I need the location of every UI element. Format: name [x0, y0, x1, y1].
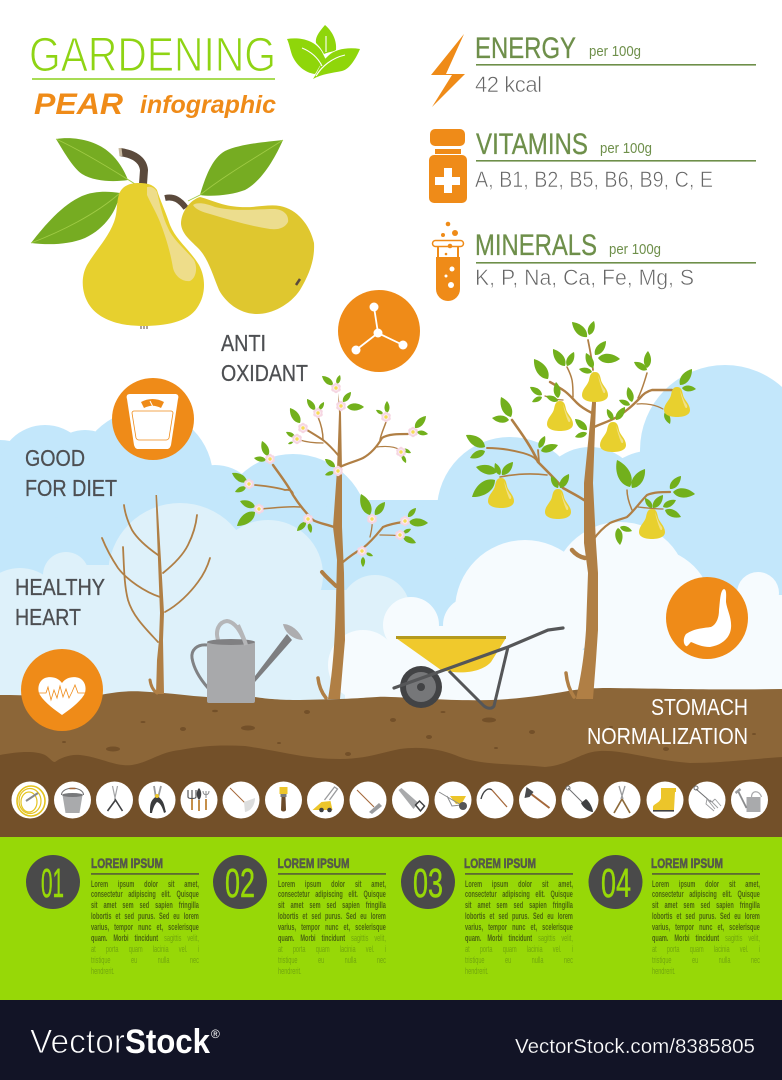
heading: vitamins: VITAMINS: [476, 128, 588, 161]
section 04: body text: hendrerit.: [652, 966, 676, 976]
heading: energy: [475, 32, 756, 66]
benefit label: heart: HEALTHY: [15, 574, 105, 600]
footer bar: ®: [211, 1027, 220, 1041]
section 03: body text: consectetur adipiscing elit. Quisque: [465, 889, 573, 899]
benefit label: diet: GOOD: [25, 445, 85, 471]
footer bar: Vector: [30, 1023, 125, 1061]
section 03: number badge: [401, 855, 455, 909]
sky: back blue clouds: [0, 365, 782, 700]
section 02: number badge: [213, 855, 267, 909]
section 03: heading: LOREM IPSUM: [464, 855, 536, 871]
bare sapling: [102, 495, 210, 694]
icon: scythe: [476, 782, 514, 818]
section 03: body text: sit amet sem sed sapien fringilla: [465, 900, 573, 910]
heading: minerals: [475, 229, 756, 264]
section 03: body text: quam. Morbi tincidunt sagittis velit,: [465, 933, 573, 943]
section 04: body text: Lorem ipsum dolor sit amet,: [652, 879, 760, 889]
icon: vitamin bottle: [429, 129, 467, 203]
section 03: body text: tristique eu nulla nec: [465, 955, 573, 965]
section 02: body text: quam. Morbi tincidunt sagittis velit,: [278, 933, 386, 943]
section 03: body text: hendrerit.: [465, 966, 489, 976]
heading: vitamins: [476, 128, 756, 162]
value: vitamins: A, B1, B2, B5, B6, B9, C, E: [475, 167, 713, 192]
benefit label: diet: [25, 445, 117, 501]
value: energy: 42 kcal: [475, 72, 542, 97]
section 01: number badge: [26, 855, 80, 909]
section 02: body text: [278, 879, 386, 976]
section 01: number badge: 01: [41, 860, 64, 906]
section 04: body text: sit amet sem sed sapien fringilla: [652, 900, 760, 910]
section 01: body text: hendrerit.: [91, 966, 115, 976]
section 03: body text: lobortis et sed purus. Sed eu lorem: [465, 911, 573, 921]
icon: spade: [562, 782, 598, 818]
section 04: body text: [652, 879, 760, 976]
heading: vitamins: per 100g: [600, 140, 652, 157]
icon: small watering can: [731, 782, 768, 818]
soil: upper layer: [0, 688, 782, 840]
icon: lightning bolt: [431, 34, 465, 107]
section 04: body text: quam. Morbi tincidunt sagittis velit,: [652, 933, 760, 943]
section 04: body text: varius, tempor nunc et, scelerisque: [652, 922, 760, 932]
icon: garden fork: [688, 782, 726, 818]
icon: logo leaves: [287, 25, 360, 79]
section 01: heading: LOREM IPSUM: [91, 855, 163, 871]
section 04: body text: at porta quam lacinia vel. i: [652, 944, 760, 954]
illustration: two pears with leaves: [31, 138, 314, 329]
icon: rubber boot: [646, 782, 684, 818]
section 03: body text: Lorem ipsum dolor sit amet,: [465, 879, 573, 889]
section 01: body text: sit amet sem sed sapien fringilla: [91, 900, 199, 910]
section 04: body text: lobortis et sed purus. Sed eu lorem: [652, 911, 760, 921]
subtitle: pear: PEAR: [34, 88, 123, 121]
section 02: body text: consectetur adipiscing elit. Quisque: [278, 889, 386, 899]
benefit label: heart: [15, 574, 105, 630]
watering can: [192, 621, 303, 703]
section 04: body text: tristique eu nulla nec: [652, 955, 760, 965]
section 02: body text: at porta quam lacinia vel. i: [278, 944, 386, 954]
fruiting pear tree: [463, 319, 696, 699]
heading: minerals: MINERALS: [475, 229, 597, 262]
benefit label: diet: FOR DIET: [25, 475, 117, 501]
icon: paint brush: [265, 782, 302, 818]
section 04: heading: LOREM IPSUM: [651, 855, 723, 871]
blossoming young tree: [230, 374, 429, 699]
icon: hand tools: [180, 782, 218, 818]
footer bar: VectorStock.com/8385805: [515, 1036, 755, 1058]
icon: flat rake: [350, 782, 386, 818]
soil: dark lower band: [0, 745, 782, 838]
section 02: body text: Lorem ipsum dolor sit amet,: [278, 879, 386, 889]
icon: hand saw: [392, 782, 429, 818]
section 02: body text: varius, tempor nunc et, scelerisque: [278, 922, 386, 932]
section 01: body text: [91, 879, 199, 976]
section 03: body text: varius, tempor nunc et, scelerisque: [465, 922, 573, 932]
footer bar: [0, 1000, 782, 1080]
benefit label: stomach: STOMACH: [651, 694, 748, 720]
section 02: number badge: 02: [225, 860, 255, 906]
icon: bucket: [54, 782, 91, 818]
title: gardening: GARDENING: [29, 29, 276, 82]
tool icons row: [12, 782, 768, 818]
heading: energy: per 100g: [589, 43, 641, 60]
icon: lawn mower: [307, 782, 344, 818]
benefit label: heart: HEART: [15, 604, 81, 630]
section 02: body text: lobortis et sed purus. Sed eu lorem: [278, 911, 386, 921]
section 02: body text: sit amet sem sed sapien fringilla: [278, 900, 386, 910]
soil: pebbles: [62, 710, 756, 756]
icon: long shears: [604, 782, 640, 818]
section 02: body text: hendrerit.: [278, 966, 302, 976]
section 04: body text: consectetur adipiscing elit. Quisque: [652, 889, 760, 899]
section 01: body text: varius, tempor nunc et, scelerisque: [91, 922, 199, 932]
section 04: number badge: 04: [601, 860, 631, 906]
icon: small wheelbarrow: [434, 782, 472, 818]
icon: test tube: [432, 222, 464, 301]
section 02: heading: LOREM IPSUM: [278, 855, 350, 871]
heading: energy: ENERGY: [475, 32, 576, 65]
section 01: body text: consectetur adipiscing elit. Quisque: [91, 889, 199, 899]
section 02: body text: tristique eu nulla nec: [278, 955, 386, 965]
title underline: [32, 78, 275, 80]
section 03: body text: [465, 879, 573, 976]
value: minerals: K, P, Na, Ca, Fe, Mg, S: [475, 265, 694, 290]
section 01: body text: Lorem ipsum dolor sit amet,: [91, 879, 199, 889]
icon: axe: [519, 782, 556, 818]
footer bar: Stock: [125, 1023, 210, 1061]
benefit: antioxidant icon: [338, 290, 420, 372]
section 01: body text: tristique eu nulla nec: [91, 955, 199, 965]
section 01: body text: quam. Morbi tincidunt sagittis velit,: [91, 933, 199, 943]
heading: minerals: per 100g: [609, 241, 661, 258]
benefit label: stomach: [587, 694, 748, 749]
benefit label: antioxidant: [221, 330, 308, 386]
benefit: stomach icon: [666, 577, 748, 659]
benefit label: antioxidant: OXIDANT: [221, 360, 308, 386]
section 01: body text: at porta quam lacinia vel. i: [91, 944, 199, 954]
icon: hose: [12, 782, 48, 818]
benefit label: antioxidant: ANTI: [221, 330, 266, 356]
benefit: heart icon: [21, 649, 103, 731]
section 01: body text: lobortis et sed purus. Sed eu lorem: [91, 911, 199, 921]
benefit label: stomach: NORMALIZATION: [587, 723, 748, 749]
section 04: number badge: [588, 855, 642, 909]
icon: hedge shears: [96, 782, 133, 818]
benefit: diet scale icon: [112, 378, 194, 460]
sky: mid pale clouds: [0, 503, 410, 700]
section 03: body text: at porta quam lacinia vel. i: [465, 944, 573, 954]
bottom green panel: [0, 837, 782, 1000]
sky: front white clouds: [328, 522, 782, 700]
section 03: number badge: 03: [413, 860, 443, 906]
wheelbarrow: [394, 628, 563, 708]
subtitle: infographic: infographic: [140, 91, 276, 119]
icon: secateurs: [138, 782, 176, 818]
icon: fan rake: [222, 782, 260, 818]
